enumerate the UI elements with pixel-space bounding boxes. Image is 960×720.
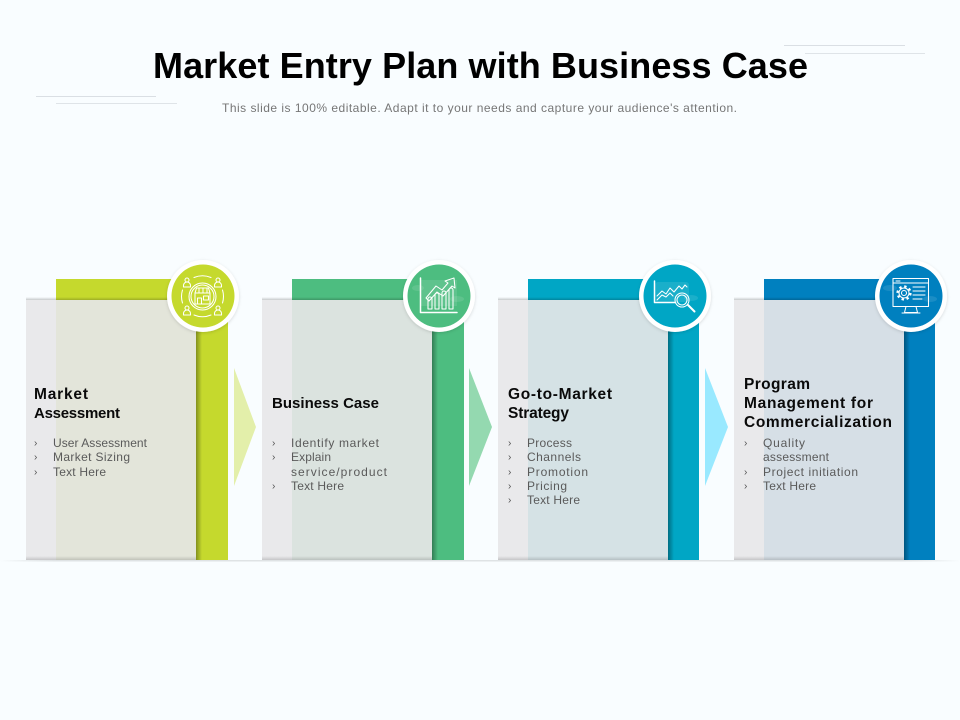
heading: go-to-market strategy: Strategy xyxy=(508,405,569,422)
bullet list: business case: › xyxy=(272,438,275,449)
bullet list: go-to-market strategy: › xyxy=(508,467,511,478)
bullet list: business case: service/product xyxy=(291,465,388,479)
bullet list: program management: › xyxy=(744,438,747,449)
heading: program management: Management for xyxy=(744,395,873,412)
bullet list: program management xyxy=(744,436,858,493)
bullet list: market assessment: Market Sizing xyxy=(53,450,130,464)
bullet list: business case: › xyxy=(272,481,275,492)
icon: chart with magnifier xyxy=(639,260,711,332)
arrow 3 xyxy=(705,368,728,486)
bullet list: market assessment: Text Here xyxy=(53,465,106,479)
panel: business case xyxy=(262,279,464,560)
bullet list: go-to-market strategy: › xyxy=(508,495,511,506)
panel: market assessment xyxy=(26,279,228,560)
bullet list: go-to-market strategy xyxy=(508,436,588,507)
heading: market assessment: Assessment xyxy=(34,405,120,422)
arrow 1 xyxy=(234,368,256,486)
bullet list: market assessment: › xyxy=(34,452,37,463)
bullet list: business case xyxy=(272,436,388,493)
title: Market Entry Plan with Business Case xyxy=(153,45,808,86)
bullet list: business case: Explain xyxy=(291,450,331,464)
panel: go-to-market strategy xyxy=(498,279,699,560)
heading: business case: Business Case xyxy=(272,395,379,412)
bullet list: business case: Text Here xyxy=(291,479,344,493)
bullet list: program management: Quality xyxy=(763,436,805,450)
bullet list: go-to-market strategy: › xyxy=(508,481,511,492)
heading: program management: Program xyxy=(744,376,810,393)
floor line xyxy=(0,560,960,562)
bullet list: market assessment: › xyxy=(34,467,37,478)
bullet list: program management: › xyxy=(744,467,747,478)
icon: monitor with gear xyxy=(875,260,947,332)
bullet list: go-to-market strategy: › xyxy=(508,438,511,449)
arrow 2 xyxy=(469,368,492,486)
bullet list: market assessment: › xyxy=(34,438,37,449)
icon: market with users xyxy=(167,260,239,332)
bullet list: program management: › xyxy=(744,481,747,492)
heading: go-to-market strategy: Go-to-Market xyxy=(508,386,612,403)
bullet list: business case: Identify market xyxy=(291,436,380,450)
bullet list: market assessment: User Assessment xyxy=(53,436,148,450)
bullet list: program management: assessment xyxy=(763,450,830,464)
panel: program management xyxy=(734,279,935,560)
bullet list: market assessment xyxy=(34,436,148,479)
heading: program management: Commercialization xyxy=(744,414,892,431)
bullet list: program management: Text Here xyxy=(763,479,816,493)
icon: growth chart xyxy=(403,260,475,332)
heading: market assessment: Market xyxy=(34,386,88,403)
bullet list: go-to-market strategy: Pricing xyxy=(527,479,567,493)
bullet list: go-to-market strategy: Text Here xyxy=(527,493,580,507)
bullet list: go-to-market strategy: Process xyxy=(527,436,572,450)
bullet list: go-to-market strategy: Promotion xyxy=(527,465,588,479)
subtitle: This slide is 100% editable. Adapt it to your needs and capture your audience's attention. xyxy=(222,101,737,115)
bullet list: program management: Project initiation xyxy=(763,465,858,479)
bullet list: go-to-market strategy: › xyxy=(508,452,511,463)
bullet list: business case: › xyxy=(272,452,275,463)
bullet list: go-to-market strategy: Channels xyxy=(527,450,581,464)
